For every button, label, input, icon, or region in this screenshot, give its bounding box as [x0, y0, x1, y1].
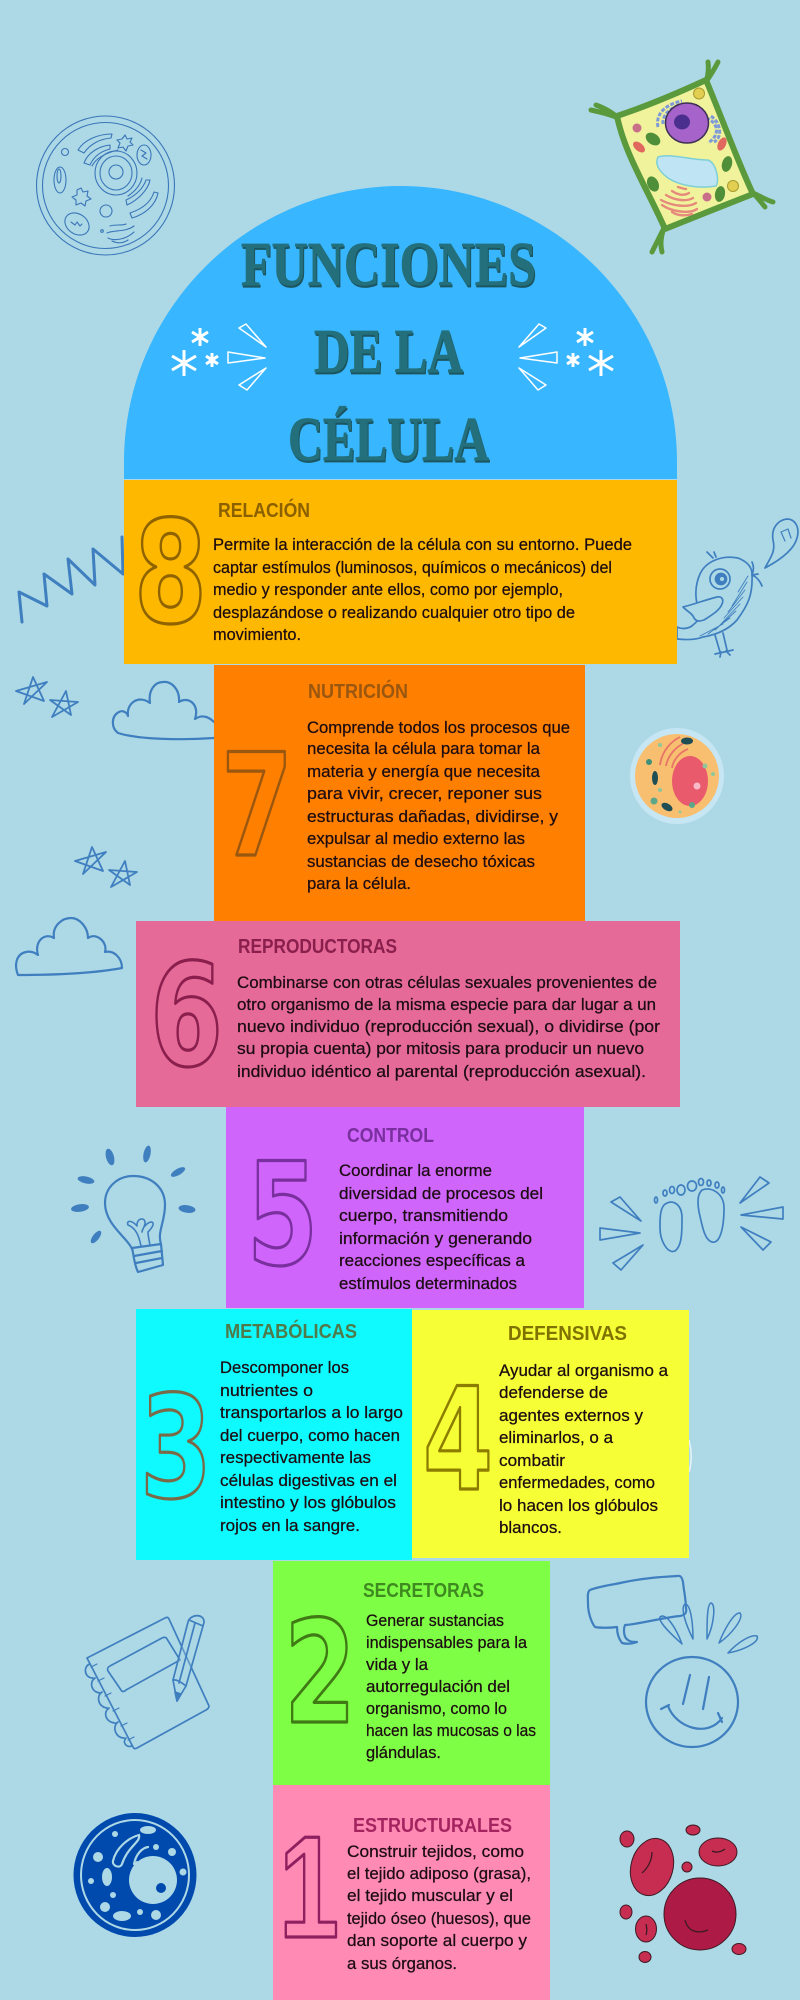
text: relación: desplazándose o realizando cualquier otro tipo de	[213, 603, 575, 622]
title: FUNCIONES	[241, 231, 536, 299]
text: defensivas: lo hacen los glóbulos	[499, 1496, 658, 1515]
icon: two stars top	[16, 677, 78, 717]
text: relación: captar estímulos (luminosos, químicos o mecánicos) del	[213, 558, 612, 577]
text: secretoras: vida y la	[366, 1655, 429, 1674]
icon: singing bird	[677, 519, 798, 657]
text: nutrición: para la célula.	[307, 874, 411, 893]
title dome	[124, 186, 677, 479]
panel: defensivas (4)	[412, 1310, 689, 1558]
number 5: 5	[247, 1133, 318, 1298]
heading: control: CONTROL	[347, 1125, 434, 1147]
icon: notebook and pencil	[85, 1616, 209, 1749]
text: estructurales: tejido óseo (huesos), que	[347, 1909, 531, 1928]
text: metabólicas: rojos en la sangre.	[220, 1516, 360, 1535]
text: estructurales: a sus órganos.	[347, 1954, 457, 1973]
text: metabólicas: transportarlos a lo largo	[220, 1403, 403, 1422]
icon: footprints	[600, 1177, 783, 1270]
text: metabólicas: nutrientes o	[220, 1381, 313, 1400]
heading: metabólicas: METABÓLICAS	[225, 1319, 357, 1343]
text: nutrición: sustancias de desecho tóxicas	[307, 852, 535, 871]
number 6: 6	[150, 934, 223, 1099]
text: estructurales	[347, 1842, 531, 1973]
text: secretoras: autorregulación del	[366, 1677, 510, 1696]
text: metabólicas: Descomponer los	[220, 1358, 349, 1377]
text: control: reacciones específicas a	[339, 1251, 526, 1270]
text: reproductoras: su propia cuenta) por mitosis para producir un nuevo	[237, 1039, 644, 1058]
text: metabólicas: respectivamente las	[220, 1448, 371, 1467]
text: estructurales: el tejido adiposo (grasa),	[347, 1864, 531, 1883]
text: control	[339, 1161, 543, 1293]
icon: red blood cells	[620, 1825, 746, 1962]
faint white arc	[689, 1440, 691, 1472]
text: relación: Permite la interacción de la célula con su entorno. Puede	[213, 535, 632, 554]
panel: nutrición (7)	[214, 665, 585, 921]
icon: plant cell	[591, 62, 773, 252]
title	[241, 231, 536, 474]
text: nutrición	[307, 718, 570, 893]
icon: cloud left	[16, 918, 122, 975]
text: metabólicas: células digestivas en el	[220, 1471, 397, 1490]
text: relación: medio y responder ante ellos, como por ejemplo,	[213, 580, 563, 599]
text: defensivas: Ayudar al organismo a	[499, 1361, 669, 1380]
text: reproductoras: otro organismo de la misma especie para dar lugar a un	[237, 995, 656, 1014]
text: estructurales: dan soporte al cuerpo y	[347, 1931, 528, 1950]
text: metabólicas	[220, 1358, 403, 1535]
text: secretoras: organismo, como lo	[366, 1699, 507, 1718]
icon: cloud top	[113, 682, 214, 739]
text: secretoras: indispensables para la	[366, 1633, 528, 1652]
text: estructurales: el tejido muscular y el	[347, 1886, 513, 1905]
text: defensivas	[499, 1361, 669, 1537]
decoration: sparkles left	[172, 324, 266, 390]
number 3: 3	[140, 1366, 212, 1531]
text: reproductoras: individuo idéntico al parental (reproducción asexual).	[237, 1062, 646, 1081]
text: defensivas: agentes externos y	[499, 1406, 643, 1425]
text: relación	[213, 535, 632, 644]
heading: relación: RELACIÓN	[218, 498, 310, 522]
text: defensivas: defenderse de	[499, 1383, 608, 1402]
panel: control (5)	[226, 1107, 584, 1308]
text: defensivas: combatir	[499, 1451, 565, 1470]
text: nutrición: materia y energía que necesita	[307, 762, 541, 781]
number 4: 4	[423, 1358, 493, 1523]
text: control: diversidad de procesos del	[339, 1184, 543, 1203]
icon: two stars bottom	[75, 847, 137, 887]
text: reproductoras	[237, 973, 660, 1081]
text: control: Coordinar la enorme	[339, 1161, 492, 1180]
heading: nutrición: NUTRICIÓN	[308, 679, 408, 703]
text: secretoras: hacen las mucosas o las	[366, 1721, 536, 1740]
panel: relación (8)	[124, 480, 677, 664]
text: reproductoras: Combinarse con otras células sexuales provenientes de	[237, 973, 657, 992]
text: metabólicas: del cuerpo, como hacen	[220, 1426, 400, 1445]
title: DE LA	[314, 318, 463, 386]
icon: dark blue cell	[74, 1813, 196, 1937]
number 1: 1	[279, 1806, 339, 1968]
title: CÉLULA	[288, 406, 489, 474]
number 2: 2	[284, 1591, 356, 1756]
heading: estructurales: ESTRUCTURALES	[353, 1815, 512, 1837]
icon: speech bubble	[588, 1576, 686, 1644]
text: nutrición: Comprende todos los procesos que	[307, 718, 570, 737]
decoration: sparkles right	[519, 324, 613, 390]
text: nutrición: necesita la célula para tomar la	[307, 739, 541, 758]
text: defensivas: blancos.	[499, 1518, 562, 1537]
icon: orange cell	[630, 728, 724, 824]
icon: outlined animal cell	[36, 116, 174, 255]
text: defensivas: enfermedades, como	[499, 1473, 655, 1492]
icon: light bulb	[71, 1145, 196, 1272]
heading: secretoras: SECRETORAS	[363, 1580, 484, 1602]
icon: smiley with rays	[646, 1603, 757, 1747]
text: secretoras: glándulas.	[366, 1743, 441, 1762]
heading: reproductoras: REPRODUCTORAS	[238, 936, 397, 958]
text: control: estímulos determinados	[339, 1274, 517, 1293]
heading: defensivas: DEFENSIVAS	[508, 1323, 627, 1345]
panel: estructurales (1)	[273, 1785, 550, 2000]
panel: reproductoras (6)	[136, 921, 680, 1107]
text: defensivas: eliminarlos, o a	[499, 1428, 614, 1447]
text: relación: movimiento.	[213, 625, 301, 644]
text: control: información y generando	[339, 1229, 532, 1248]
text: nutrición: expulsar al medio externo las	[307, 829, 525, 848]
text: control: cuerpo, transmitiendo	[339, 1206, 508, 1225]
text: secretoras	[366, 1611, 536, 1762]
text: metabólicas: intestino y los glóbulos	[220, 1493, 396, 1512]
panel: secretoras (2)	[273, 1561, 550, 1785]
panel: metabólicas (3)	[136, 1309, 412, 1560]
text: estructurales: Construir tejidos, como	[347, 1842, 524, 1861]
number 8: 8	[134, 491, 207, 656]
text: nutrición: estructuras dañadas, dividirse, y	[307, 807, 559, 826]
text: nutrición: para vivir, crecer, reponer sus	[307, 784, 542, 803]
text: secretoras: Generar sustancias	[366, 1611, 504, 1630]
number 7: 7	[221, 724, 293, 889]
text: reproductoras: nuevo individuo (reproducción sexual), o dividirse (por	[237, 1017, 660, 1036]
icon: zigzag scribble	[19, 537, 123, 622]
